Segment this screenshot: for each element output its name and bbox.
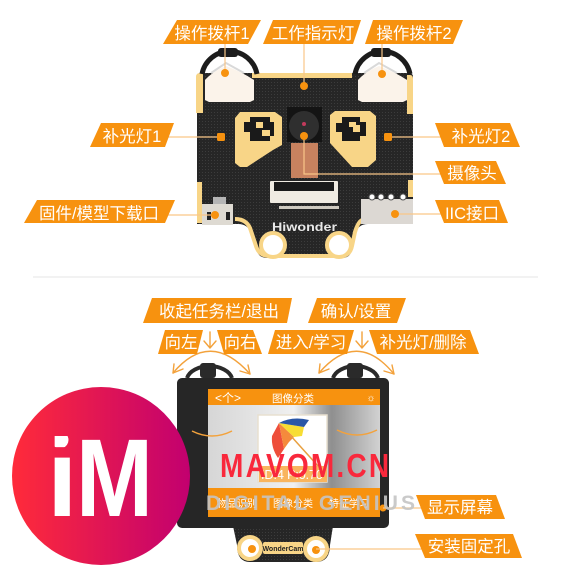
IIC port (361, 194, 413, 224)
image card (258, 415, 327, 482)
label: 补光灯2 (435, 123, 520, 147)
label: 操作拨杆1: 操作拨杆1 (174, 24, 250, 43)
FPC connector (270, 181, 339, 209)
label: 向右: 向右 (224, 333, 256, 352)
marker dots, front view (248, 504, 386, 554)
camera module (287, 107, 322, 178)
screen: 特征学习 (329, 497, 369, 510)
image card: ID:4 P:0.70 (261, 467, 323, 482)
label: 操作拨杆2 (365, 20, 463, 44)
toggle switch 2 (355, 48, 410, 102)
watermark: iM badge: M (76, 416, 153, 540)
label: 安装固定孔 (415, 534, 522, 558)
screen top bar text: <个> (215, 391, 241, 405)
label: 操作拨杆1 (163, 20, 261, 44)
label: 补光灯1: 补光灯1 (103, 127, 161, 146)
arrow: left dial press (204, 332, 216, 348)
label: 收起任务栏/退出: 收起任务栏/退出 (159, 302, 279, 321)
device body (177, 378, 389, 528)
brand text: Hiwonder (272, 220, 337, 234)
mounting tab (233, 526, 333, 562)
marker dots, top panel (211, 69, 399, 219)
watermark: DIGITAL GENIUS: DIGITAL GENIUS (206, 492, 415, 515)
screen: 图像分类 (273, 497, 313, 510)
arrow: right dial press (356, 332, 368, 348)
label: 向右 (217, 330, 262, 354)
label: 向左 (158, 330, 203, 354)
icon: umbrella (272, 419, 318, 466)
label: 补光灯/删除: 补光灯/删除 (379, 333, 467, 352)
label: 确认/设置: 确认/设置 (321, 302, 391, 321)
leader lines, top panel (165, 44, 444, 215)
watermark: MAVOM.CN: MAVOM.CN (220, 448, 391, 485)
mounting tab: WonderCam (262, 546, 304, 553)
left thumb dial (187, 363, 232, 378)
label: 进入/学习 (268, 330, 354, 354)
label: 确认/设置 (308, 298, 406, 323)
label: 显示屏幕: 显示屏幕 (427, 498, 493, 517)
label: 操作拨杆2: 操作拨杆2 (376, 24, 452, 43)
label: 固件/模型下载口 (24, 200, 175, 223)
label: 向左: 向左 (164, 333, 198, 352)
leader lines, bottom panel (316, 508, 425, 549)
label: 工作指示灯: 工作指示灯 (272, 24, 354, 43)
label: IIC接口: IIC接口 (445, 204, 499, 223)
label: 显示屏幕 (416, 495, 505, 519)
label: 摄像头 (435, 161, 506, 184)
label: 安装固定孔: 安装固定孔 (428, 537, 510, 556)
device, front view (177, 363, 389, 562)
screen curves (192, 431, 232, 436)
arrow: left dial rotation (173, 351, 250, 374)
label: IIC接口 (435, 200, 508, 223)
gold face pad left (235, 112, 282, 167)
label: 补光灯2: 补光灯2 (452, 127, 510, 146)
label: 收起任务栏/退出 (143, 298, 292, 323)
label: 进入/学习: 进入/学习 (276, 333, 346, 352)
watermark: iM badge: i (47, 417, 78, 540)
gold edge plating (196, 73, 413, 223)
label: 固件/模型下载口: 固件/模型下载口 (39, 204, 159, 223)
toggle switch 1 (202, 48, 257, 102)
screen (192, 389, 380, 517)
label: 补光灯1 (90, 123, 174, 147)
label: 补光灯/删除 (369, 330, 479, 354)
micro USB port (202, 197, 233, 225)
right thumb dial (333, 363, 378, 378)
screen bottom tabs: 物品识别 (217, 497, 257, 510)
label: 摄像头: 摄像头 (447, 164, 497, 183)
label: 工作指示灯 (263, 20, 361, 44)
watermark: iM badge (12, 387, 190, 565)
icon: bulb: ☼ (366, 393, 376, 404)
gold face pad right (330, 111, 376, 167)
arrow: right dial rotation (319, 351, 394, 374)
screen: 图像分类 (272, 392, 314, 405)
circuit board, back view (196, 48, 413, 258)
